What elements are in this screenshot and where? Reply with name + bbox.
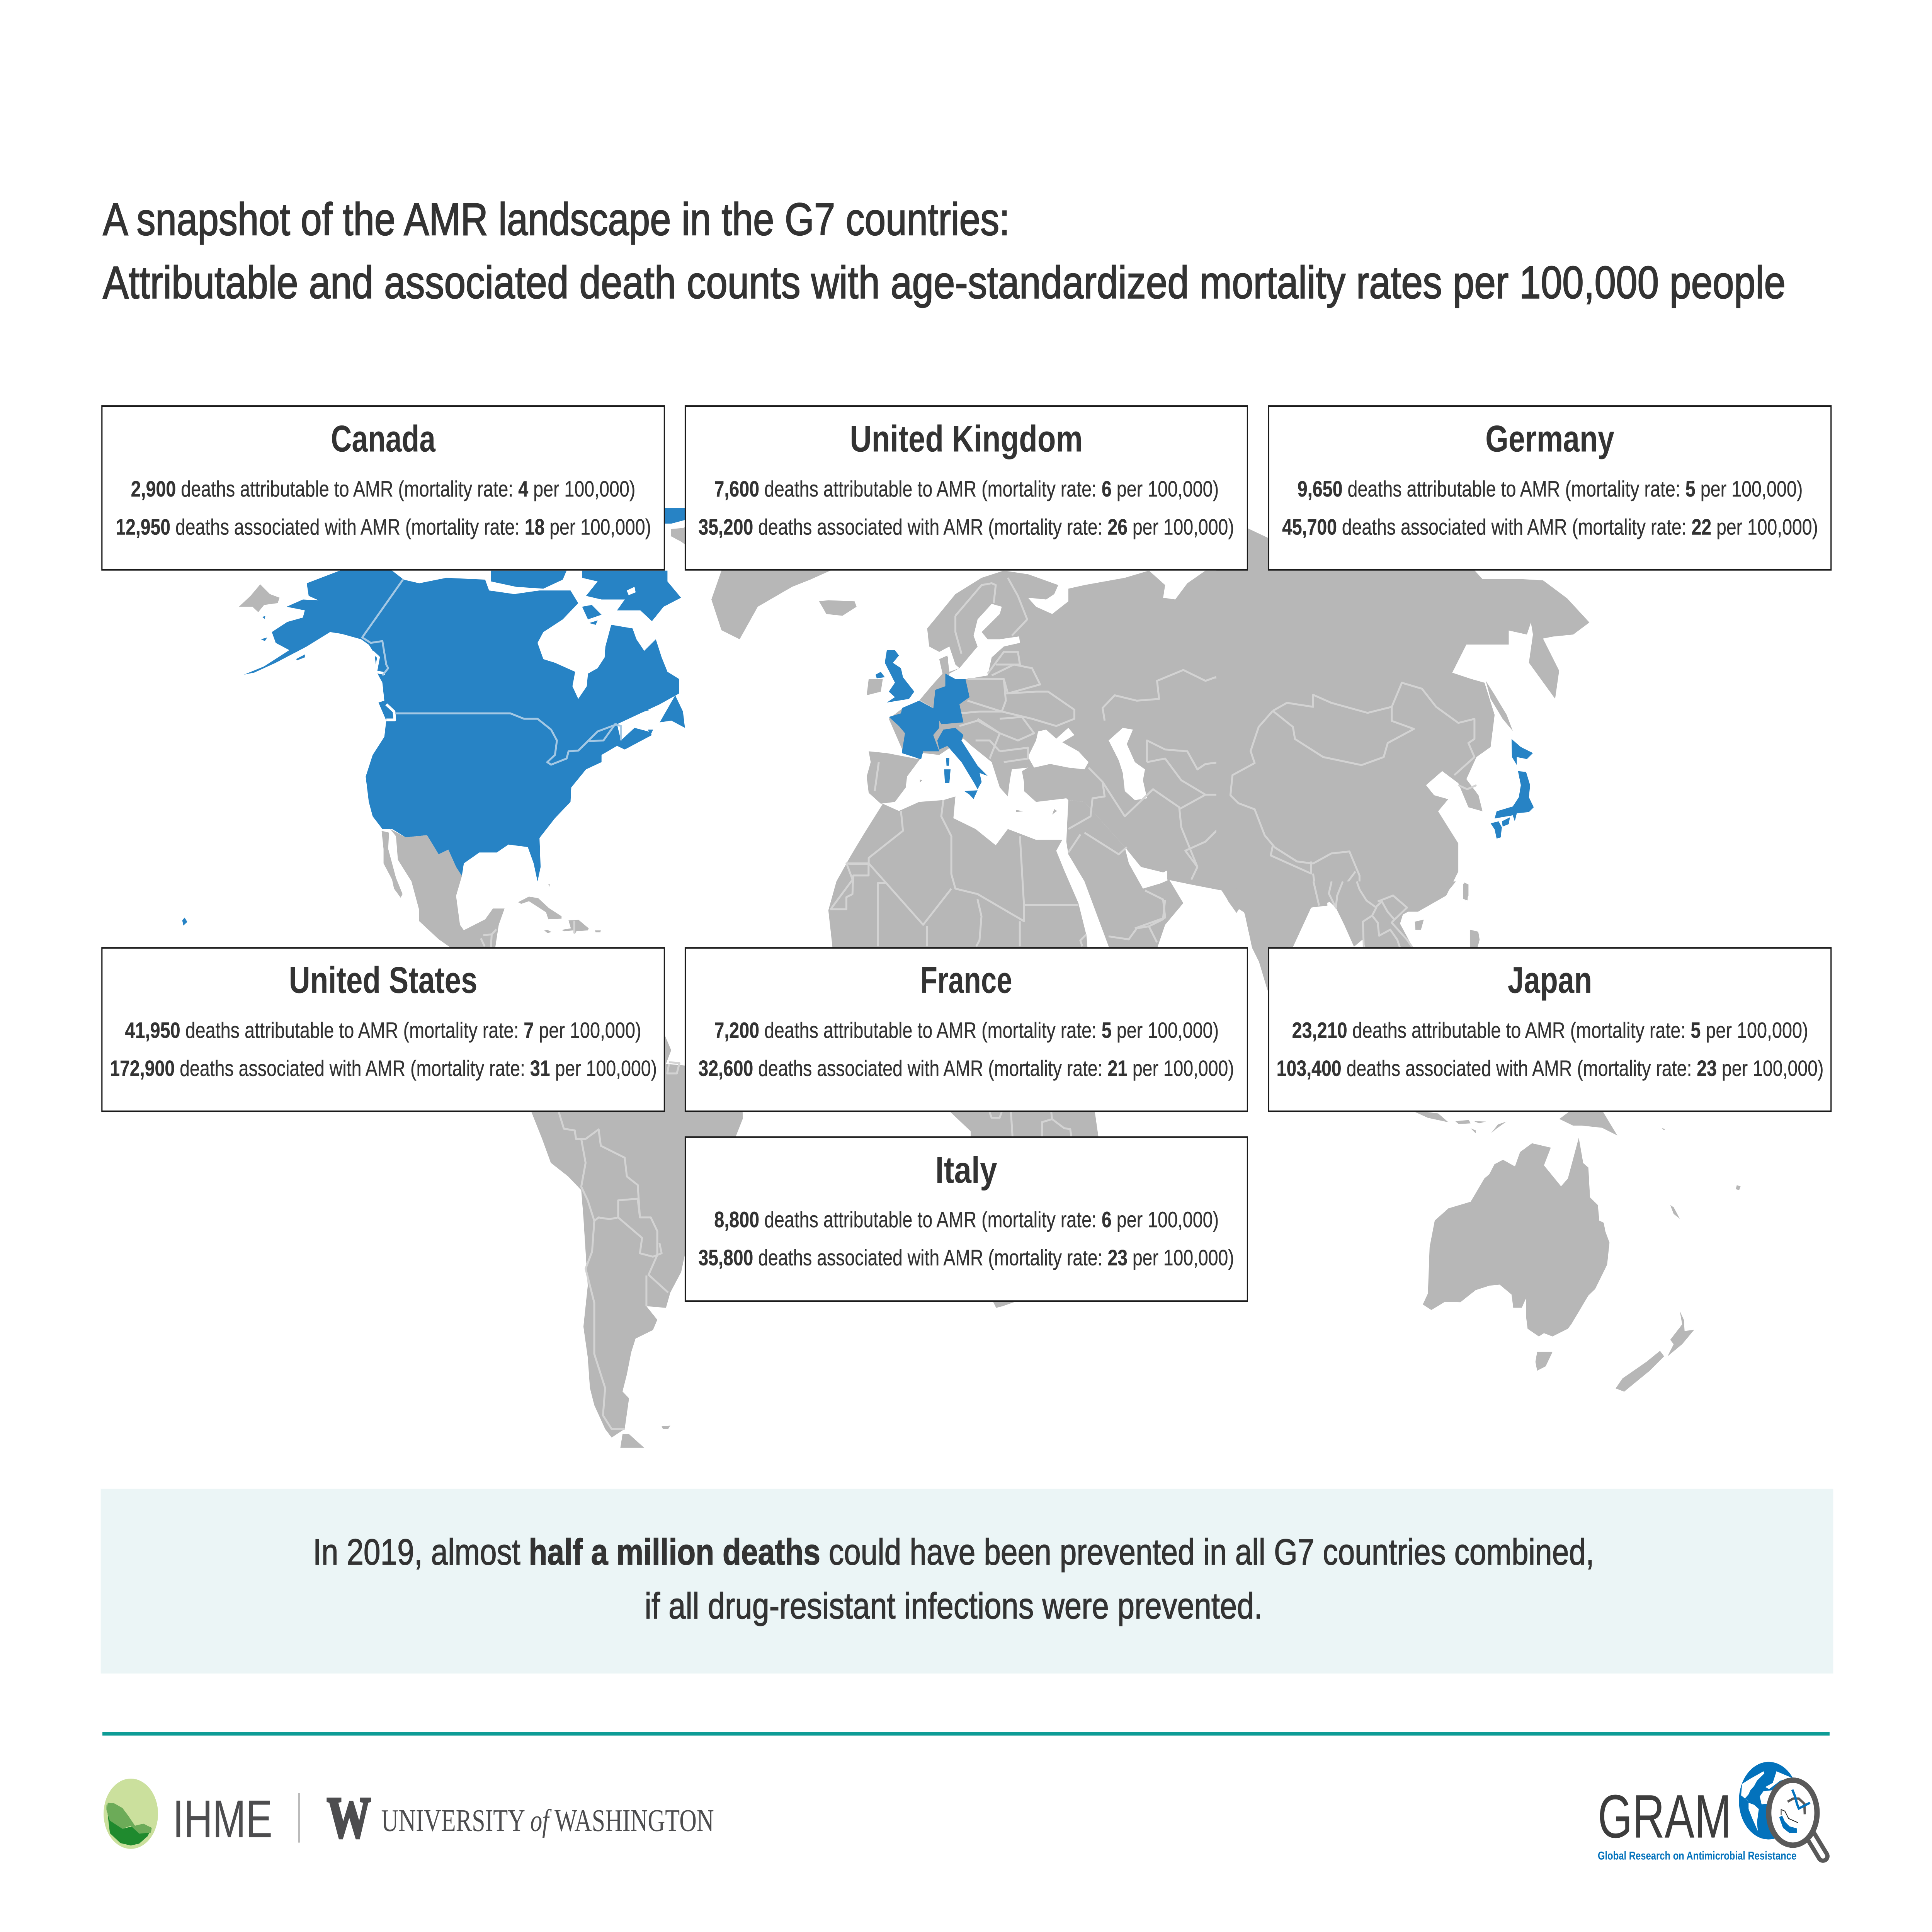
panel: United States: 172,900 deaths associated with AMR (mortality rate: 31 per 100,000) <box>110 1056 657 1081</box>
panel: Japan: 23,210 deaths attributable to AMR (mortality rate: 5 per 100,000) <box>1292 1018 1808 1043</box>
panel: Italy: Italy <box>935 1150 997 1191</box>
map: South and Southeast Asia <box>1234 881 1480 1022</box>
panel: Germany: 45,700 deaths associated with AMR (mortality rate: 22 per 100,000) <box>1282 514 1818 539</box>
footer rule <box>102 1732 1830 1736</box>
logo divider <box>298 1793 300 1843</box>
panel: Germany: 9,650 deaths attributable to AMR (mortality rate: 5 per 100,000) <box>1298 476 1803 501</box>
logo: GRAM <box>1598 1762 1823 1862</box>
logo: University of Washington: W <box>327 1785 371 1850</box>
callout <box>101 1489 1833 1673</box>
map: Germany <box>933 673 969 724</box>
panel: United Kingdom <box>685 406 1247 570</box>
logo: IHME: IHME <box>173 1790 272 1849</box>
map: East Asia <box>1216 562 1589 947</box>
panel: France: France <box>920 959 1012 1001</box>
map: Mexico <box>382 831 403 898</box>
panel: United States: 41,950 deaths attributable to AMR (mortality rate: 7 per 100,000) <box>125 1018 641 1043</box>
map: South America <box>503 1019 1022 1448</box>
panel: Canada: Canada <box>331 418 436 460</box>
map: United Kingdom <box>876 650 914 702</box>
panel: United Kingdom: United Kingdom <box>850 418 1083 460</box>
logo: GRAM: GRAM <box>1598 1782 1731 1851</box>
callout: In 2019, almost half a million deaths could have been prevented in all G7 countries combined, <box>313 1532 1594 1572</box>
world map <box>182 508 1741 1448</box>
logo: IHME <box>104 1779 272 1849</box>
map: North America <box>182 508 685 950</box>
panel: France: 7,200 deaths attributable to AMR (mortality rate: 5 per 100,000) <box>714 1018 1219 1043</box>
panel: Japan: Japan <box>1508 959 1592 1001</box>
panel: United Kingdom: 35,200 deaths associated with AMR (mortality rate: 26 per 100,000) <box>698 514 1234 539</box>
logo: University of Washington <box>327 1785 714 1850</box>
panel: France <box>685 948 1247 1111</box>
callout: if all drug-resistant infections were prevented. <box>645 1585 1262 1626</box>
panel: Italy <box>685 1137 1247 1301</box>
panel: Canada <box>102 406 664 570</box>
map: Caribbean <box>481 884 601 947</box>
title: A snapshot of the AMR landscape in the G7 countries: <box>103 194 1010 245</box>
map: Europe, West Asia, North Africa <box>671 509 1313 960</box>
panel: Japan <box>1269 948 1831 1111</box>
panel: Italy: 8,800 deaths attributable to AMR (mortality rate: 6 per 100,000) <box>714 1207 1219 1232</box>
map: European and Asian borders <box>830 578 1272 929</box>
panel: United States <box>102 948 664 1111</box>
panel: Germany: Germany <box>1485 418 1614 460</box>
panel: United Kingdom: 7,600 deaths attributable to AMR (mortality rate: 6 per 100,000) <box>714 476 1219 501</box>
panel: Germany <box>1269 406 1831 570</box>
panel: Italy: 35,800 deaths associated with AMR (mortality rate: 23 per 100,000) <box>698 1245 1234 1270</box>
map: France <box>889 701 939 759</box>
panel: Canada: 2,900 deaths attributable to AMR (mortality rate: 4 per 100,000) <box>131 476 635 501</box>
logo: University of Washington: UNIVERSITY of WASHINGTON <box>381 1803 714 1838</box>
map: Central Africa <box>830 864 1165 1165</box>
panel: France: 32,600 deaths associated with AMR (mortality rate: 21 per 100,000) <box>698 1056 1234 1081</box>
title: Attributable and associated death counts with age-standardized mortality rates per 100,000 people <box>103 257 1786 308</box>
map: Oceania <box>1411 1110 1741 1392</box>
panel: Japan: 103,400 deaths associated with AMR (mortality rate: 23 per 100,000) <box>1277 1056 1824 1081</box>
map: Japan <box>1491 739 1534 838</box>
map: Italy <box>937 728 988 799</box>
icon: globe and magnifying glass <box>1739 1762 1823 1856</box>
panel: United States: United States <box>289 959 478 1001</box>
title <box>103 194 1786 308</box>
panel: Canada: 12,950 deaths associated with AMR (mortality rate: 18 per 100,000) <box>116 514 651 539</box>
logo: GRAM: Global Research on Antimicrobial Resistance <box>1598 1849 1796 1862</box>
